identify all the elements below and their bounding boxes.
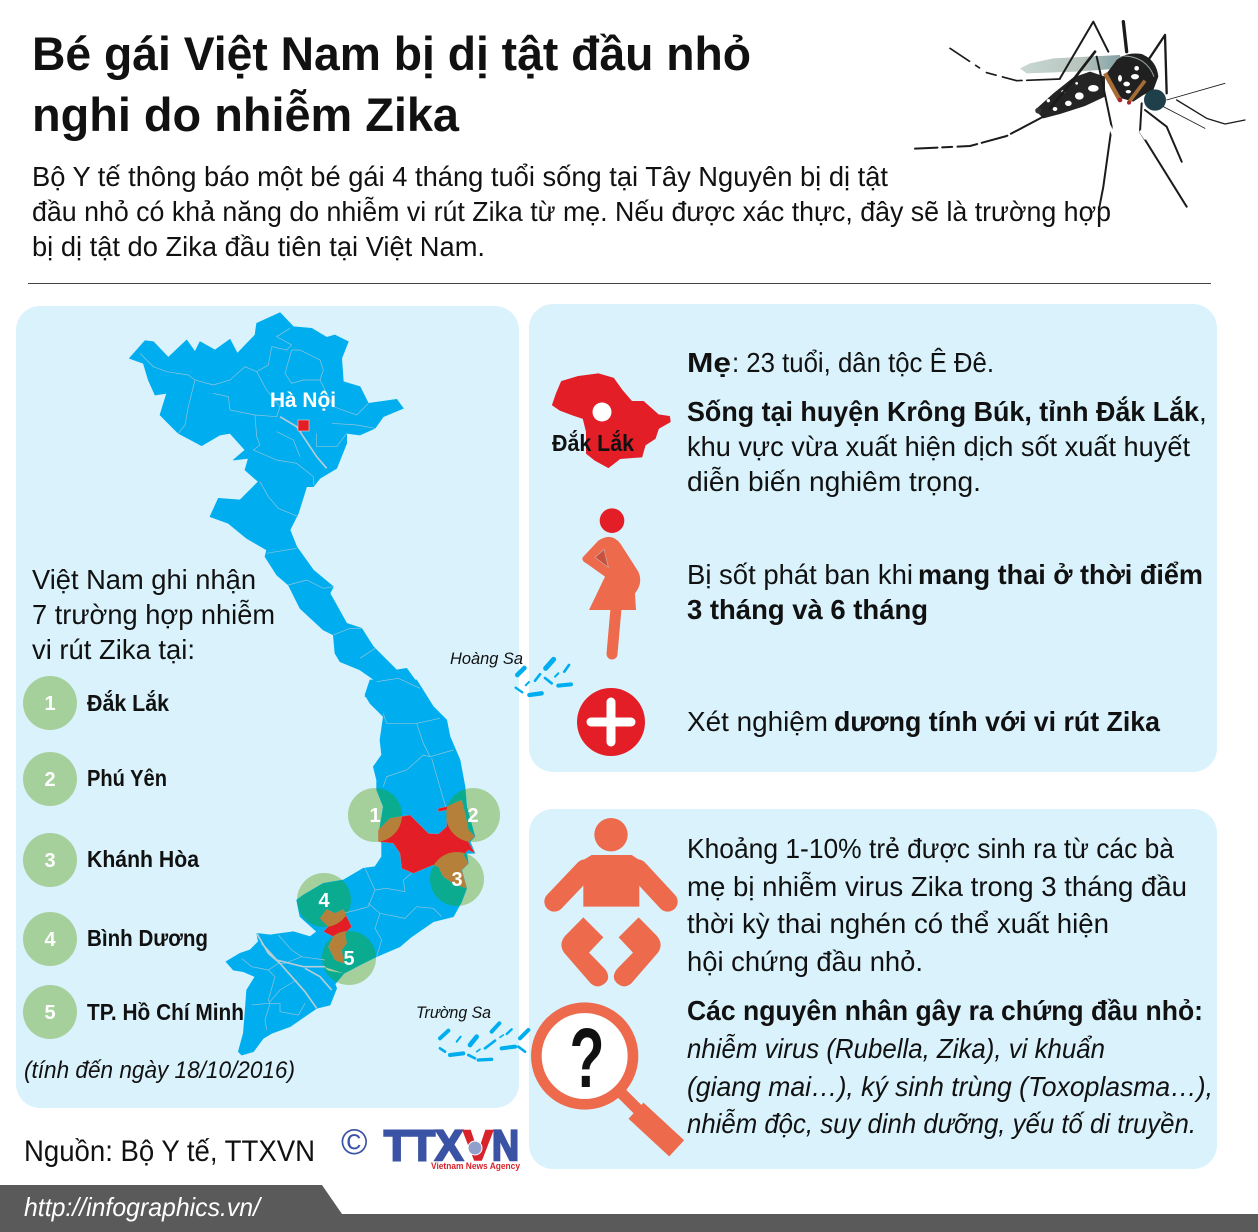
title: Bé gái Việt Nam bị dị tật đầu nhỏ bbox=[32, 27, 751, 80]
case count text: 7 trường hợp nhiễm bbox=[32, 599, 275, 630]
land mass bbox=[129, 313, 475, 1055]
Truong Sa islands bbox=[416, 1003, 528, 1060]
province borders north bbox=[140, 328, 420, 688]
panel: microcephaly information bbox=[529, 809, 1217, 1169]
legend: provinces: 3 bbox=[44, 850, 56, 872]
residence text: khu vực vừa xuất hiện dịch sốt xuất huyết bbox=[687, 431, 1190, 462]
Truong Sa islands: Trường Sa bbox=[416, 1003, 491, 1022]
icon: magnifier with question mark: ? bbox=[570, 1011, 604, 1105]
test result text: dương tính với vi rút Zika bbox=[834, 706, 1160, 737]
residence text: Sống tại huyện Krông Búk, tỉnh Đắk Lắk bbox=[687, 396, 1199, 427]
footer bar bbox=[0, 1185, 1258, 1232]
Hanoi label: Hà Nội bbox=[270, 389, 336, 412]
legend: provinces: Khánh Hòa bbox=[87, 846, 199, 872]
date note: (tính đến ngày 18/10/2016) bbox=[24, 1057, 295, 1084]
microcephaly rate text: mẹ bị nhiễm virus Zika trong 3 tháng đầu bbox=[687, 871, 1187, 902]
legend: provinces: 5 bbox=[44, 1002, 56, 1024]
map numbers: 5 bbox=[343, 948, 355, 970]
pregnancy text bbox=[687, 559, 1203, 625]
source: Nguồn: Bộ Y tế, TTXVN bbox=[24, 1135, 315, 1168]
case count text bbox=[32, 564, 275, 665]
icon: baby bbox=[554, 818, 668, 986]
logo: TTXVN: TTX bbox=[384, 1122, 463, 1170]
map numbers: 1 bbox=[369, 805, 381, 827]
microcephaly rate text: hội chứng đầu nhỏ. bbox=[687, 946, 923, 977]
title bbox=[32, 27, 751, 141]
legend: provinces bbox=[23, 676, 244, 1039]
estuary sliver bbox=[323, 967, 344, 973]
Hoang Sa islands: Hoàng Sa bbox=[450, 649, 523, 668]
legend: provinces: 1 bbox=[44, 693, 56, 715]
map numbers bbox=[318, 805, 479, 970]
intro text: bị dị tật do Zika đầu tiên tại Việt Nam. bbox=[32, 231, 485, 262]
pregnancy text: Bị sốt phát ban khi bbox=[687, 559, 913, 590]
icon: pregnant woman bbox=[582, 508, 640, 654]
legend: provinces: 4 bbox=[44, 929, 56, 951]
icon: Dak Lak province bbox=[552, 374, 670, 467]
red provinces with cases bbox=[320, 800, 475, 963]
copyright symbol: © bbox=[341, 1121, 368, 1162]
causes text: nhiễm độc, suy dinh dưỡng, yếu tố di truyền. bbox=[687, 1108, 1196, 1139]
Hanoi marker bbox=[298, 420, 309, 431]
causes text: Các nguyên nhân gây ra chứng đầu nhỏ: bbox=[687, 995, 1203, 1026]
logo: TTXVN bbox=[384, 1122, 520, 1171]
icon: medical plus bbox=[577, 688, 645, 756]
legend: provinces: Bình Dương bbox=[87, 925, 208, 951]
residence text: diễn biến nghiêm trọng. bbox=[687, 466, 981, 497]
case count text: Việt Nam ghi nhận bbox=[32, 564, 256, 595]
residence text bbox=[687, 347, 1207, 497]
icon: Dak Lak province: Đắk Lắk bbox=[552, 429, 634, 456]
residence text: : 23 tuổi, dân tộc Ê Đê. bbox=[732, 347, 994, 378]
brown overlap bbox=[320, 800, 475, 964]
test result text: Xét nghiệm bbox=[687, 706, 828, 737]
residence text: Mẹ bbox=[687, 347, 731, 378]
case count text: vi rút Zika tại: bbox=[32, 634, 195, 665]
Hoang Sa islands bbox=[450, 649, 571, 695]
pregnancy text: 3 tháng và 6 tháng bbox=[687, 594, 928, 625]
map numbers: 2 bbox=[467, 805, 479, 827]
province borders south bbox=[242, 713, 453, 1030]
legend: provinces: Đắk Lắk bbox=[87, 689, 169, 716]
causes text: nhiễm virus (Rubella, Zika), vi khuẩn bbox=[687, 1033, 1105, 1064]
title: nghi do nhiễm Zika bbox=[32, 88, 460, 141]
causes text: (giang mai…), ký sinh trùng (Toxoplasma…), bbox=[687, 1071, 1213, 1102]
intro text: Bộ Y tế thông báo một bé gái 4 tháng tuổi sống tại Tây Nguyên bị dị tật bbox=[32, 161, 888, 192]
microcephaly rate text: Khoảng 1-10% trẻ được sinh ra từ các bà bbox=[687, 833, 1174, 864]
logo: TTXVN: N bbox=[492, 1122, 519, 1170]
logo: TTXVN: V bbox=[463, 1122, 493, 1170]
microcephaly rate text bbox=[687, 833, 1187, 977]
footer bar: http://infographics.vn/ bbox=[24, 1192, 263, 1222]
teal overlap bbox=[297, 788, 475, 982]
map numbers: 4 bbox=[318, 890, 330, 912]
causes text bbox=[687, 995, 1213, 1139]
panel: mother information bbox=[529, 304, 1217, 772]
case-area halos bbox=[297, 788, 500, 985]
intro text bbox=[32, 161, 1111, 262]
logo: TTXVN: Vietnam News Agency bbox=[431, 1161, 520, 1171]
microcephaly rate text: thời kỳ thai nghén có thể xuất hiện bbox=[687, 908, 1109, 939]
test result text bbox=[687, 706, 1160, 737]
panel: map bbox=[16, 306, 519, 1108]
intro text: đầu nhỏ có khả năng do nhiễm vi rút Zika từ mẹ. Nếu được xác thực, đây sẽ là trường hợp bbox=[32, 196, 1111, 227]
map of Vietnam bbox=[129, 313, 500, 1055]
legend: provinces: 2 bbox=[44, 769, 56, 791]
legend: provinces: Phú Yên bbox=[87, 765, 167, 791]
residence text: , bbox=[1199, 396, 1207, 427]
map numbers: 3 bbox=[451, 869, 463, 891]
legend: provinces: TP. Hồ Chí Minh bbox=[87, 999, 244, 1025]
pregnancy text: mang thai ở thời điểm bbox=[918, 559, 1203, 590]
icon: mosquito bbox=[915, 22, 1245, 207]
icon: magnifier with question mark bbox=[536, 1008, 677, 1148]
